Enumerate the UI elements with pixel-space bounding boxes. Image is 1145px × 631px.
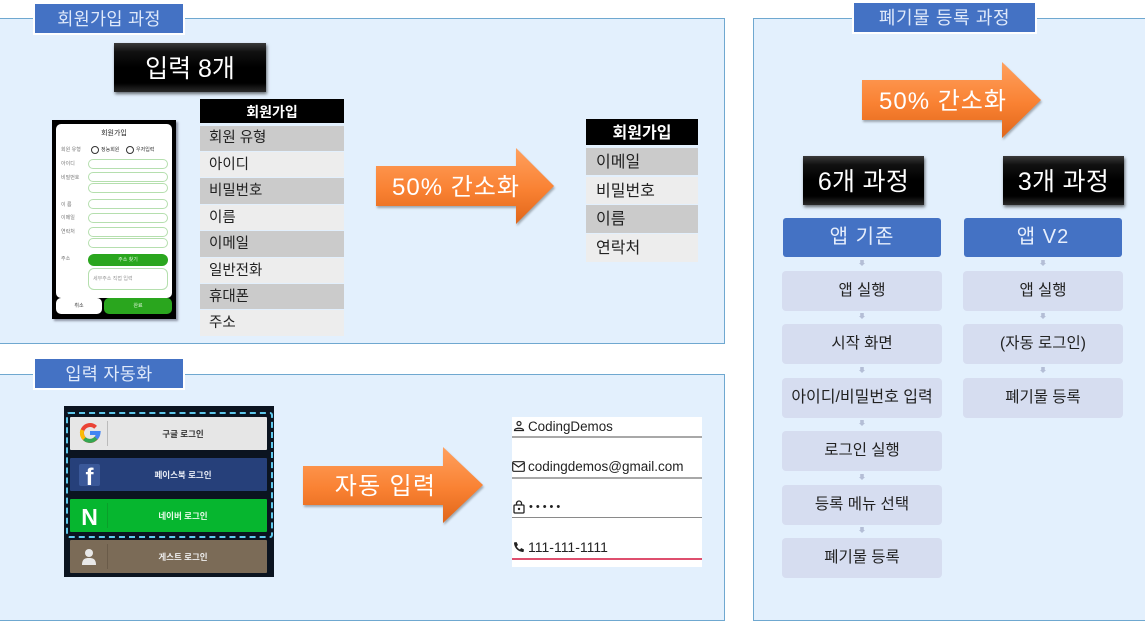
step: launch app: 앱 실행 [838,282,886,299]
field: phone: 111-111-1111 [528,539,608,555]
step header: app V2: 앱 V2 [1017,226,1069,248]
table: 4 simplified fields: 이름 [596,211,625,228]
step header: app V2 [964,218,1122,257]
filled form screenshot [512,417,702,567]
field: password [513,500,563,514]
flow: existing app [782,218,942,578]
label: 6 steps [803,156,924,205]
table: 8 sign-up fields: 이메일 [209,236,249,252]
step: register waste: 폐기물 등록 [1005,389,1081,406]
field: name: CodingDemos [528,419,613,434]
step: run login: 로그인 실행 [824,442,900,459]
phone screenshot: sign-up form: 세부주소 직접 입력 [93,276,133,282]
button: guest login [70,540,267,573]
phone screenshot: sign-up form: 회원 유형 [61,147,81,153]
arrow: auto input [302,447,484,525]
heading: sign-up process: 회원가입 과정 [57,9,161,29]
phone screenshot: sign-up form: 주소 찾기 [118,257,138,263]
flow: app V2 [963,218,1123,418]
phone screenshot: sign-up form: 이메일 [61,215,75,221]
heading: input automation: 입력 자동화 [65,364,153,384]
table: 8 sign-up fields: 회원가입 [246,104,298,120]
label: 8 inputs [114,43,266,92]
arrow: 50% simplification (registration) [862,62,1042,140]
phone screenshot: sign-up form [52,120,176,319]
table: 8 sign-up fields [200,99,344,336]
step: start screen [782,324,942,364]
step header: existing app: 앱 기존 [830,226,894,248]
step: auto login: (자동 로그인) [1000,335,1086,352]
dashed highlight around auto-fill logins [66,412,273,538]
phone screenshot: sign-up form: 회원가입 [101,130,127,137]
step: select register menu [782,485,942,525]
table: 4 simplified fields: 비밀번호 [596,183,655,200]
field: email: codingdemos@gmail.com [528,459,684,474]
table: 4 simplified fields: 이메일 [596,154,640,171]
step: launch app [782,271,942,311]
button: Google login [70,417,267,450]
step: enter id and password [782,378,942,418]
panel: waste registration process [753,18,1145,621]
panel: input automation [0,374,725,621]
panel: sign-up process [0,18,725,344]
table: 8 sign-up fields: 이름 [209,210,236,226]
label: 6 steps: 6개 과정 [818,168,909,196]
heading: input automation [34,358,184,389]
phone screenshot: sign-up form: 비밀번호 [61,175,79,181]
step: register waste [963,378,1123,418]
heading: waste registration process: 폐기물 등록 과정 [879,8,1010,28]
step: auto login [963,324,1123,364]
table: 4 simplified fields: 연락처 [596,240,640,257]
table: 8 sign-up fields: 회원 유형 [209,130,266,146]
button: Facebook login: f [86,464,94,491]
phone screenshot: sign-up form: 정능회원 [101,147,119,153]
step: launch app [963,271,1123,311]
phone screenshot: sign-up form: 이 름 [61,202,72,208]
step: enter id and password: 아이디/비밀번호 입력 [791,389,933,406]
phone screenshot: sign-up form: 연락처 [61,229,75,235]
step: launch app: 앱 실행 [1019,282,1067,299]
arrow: auto input: 자동 입력 [335,473,436,500]
button: Facebook login: 페이스북 로그인 [154,470,212,480]
step: start screen: 시작 화면 [831,335,893,352]
button: Naver login [70,499,267,532]
step: select register menu: 등록 메뉴 선택 [815,496,909,513]
arrow: 50% simplification (sign-up): 50% 간소화 [392,174,520,201]
button: Naver login: 네이버 로그인 [158,511,208,521]
phone screenshot: sign-up form: 아이디 [61,161,75,167]
step: run login [782,431,942,471]
label: 3 steps [1003,156,1124,205]
heading: waste registration process [853,2,1036,33]
step: register waste [782,538,942,578]
table: 4 simplified fields: 회원가입 [613,125,671,142]
table: 8 sign-up fields: 아이디 [209,157,249,173]
button: Naver login: N [81,504,98,530]
button: Google login: 구글 로그인 [162,429,204,439]
label: 8 inputs: 입력 8개 [145,55,235,83]
arrow: 50% simplification (registration): 50% 간소화 [879,88,1007,115]
table: 4 simplified fields [586,119,698,262]
social login screenshot [64,406,274,577]
table: 8 sign-up fields: 비밀번호 [209,183,262,199]
button: Facebook login [70,458,267,491]
table: 8 sign-up fields: 주소 [209,315,236,331]
label: 3 steps: 3개 과정 [1018,168,1109,196]
step: register waste: 폐기물 등록 [824,549,900,566]
phone screenshot: sign-up form: 취소 [74,303,84,309]
phone screenshot: sign-up form: 우저입력 [136,147,154,153]
button: guest login: 게스트 로그인 [158,552,208,562]
step header: existing app [783,218,941,257]
table: 8 sign-up fields: 일반전화 [209,263,262,279]
heading: sign-up process [34,3,184,34]
field: password: ••••• [529,501,563,513]
phone screenshot: sign-up form: 주소 [61,256,70,262]
arrow: 50% simplification (sign-up) [376,148,556,226]
phone screenshot: sign-up form: 완료 [133,303,143,309]
table: 8 sign-up fields: 휴대폰 [209,289,249,305]
